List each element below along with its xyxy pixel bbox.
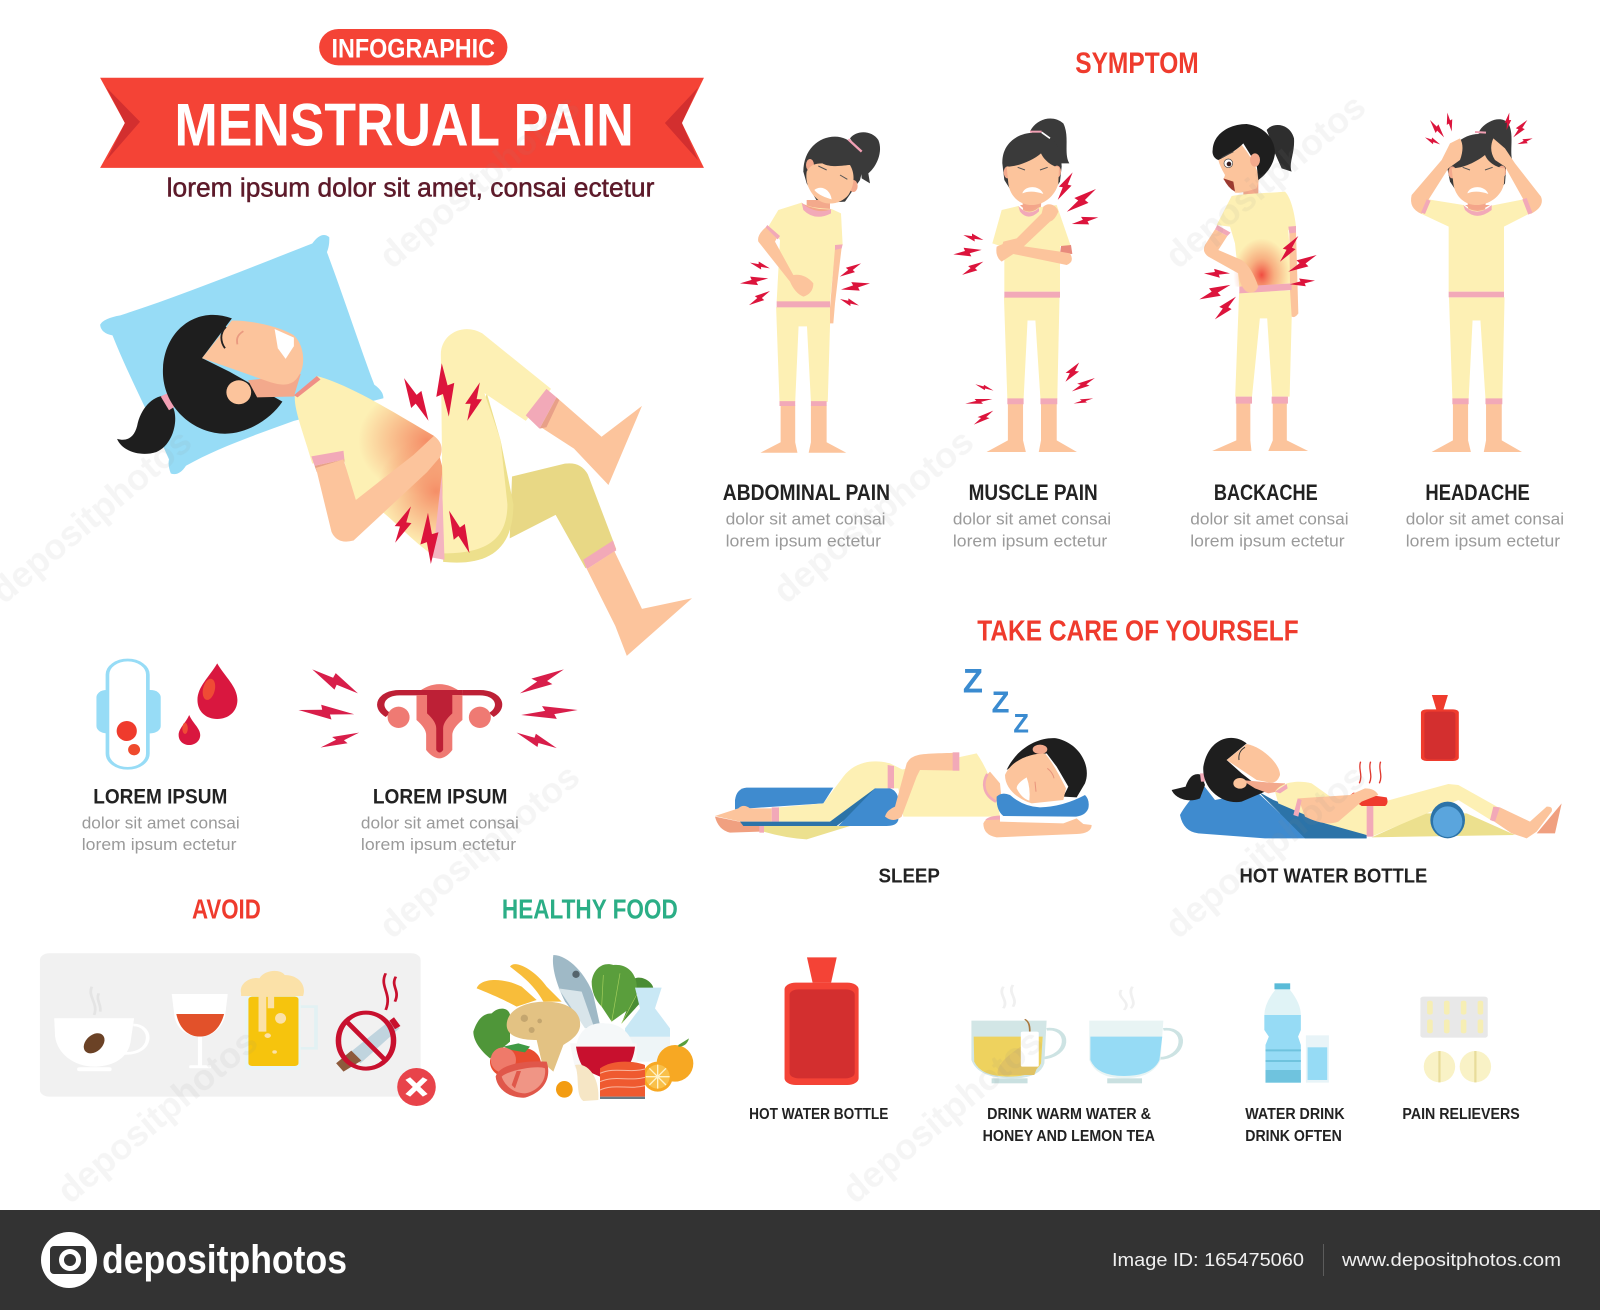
title ribbon — [100, 78, 704, 168]
symptom labels: lorem ipsum ectetur — [953, 532, 1108, 550]
figure: abdominal pain — [758, 132, 880, 453]
icon: wine glass — [172, 994, 228, 1068]
icon: coffee cup — [54, 987, 148, 1071]
heading: healthy food: HEALTHY FOOD — [502, 893, 678, 924]
watermarks: depositphotos — [49, 1020, 265, 1211]
symptom labels: MUSCLE PAIN — [969, 481, 1098, 505]
icon: bolts abdominal — [739, 259, 871, 309]
text: lorem ipsum right: LOREM IPSUM — [373, 785, 507, 808]
icon: pain bolts — [388, 362, 487, 564]
icon: water bottle and glass — [1264, 983, 1329, 1083]
figure: headache — [1411, 119, 1542, 452]
icon: tea cup — [971, 985, 1064, 1083]
icon: no smoking — [336, 973, 400, 1072]
logo text: depositphotos — [102, 1238, 347, 1282]
icon: bolts backache — [1197, 233, 1320, 323]
label: hot water bottle: HOT WATER BOTTLE — [1240, 865, 1427, 888]
panel: symptoms — [723, 47, 1564, 550]
figure: sleeping woman — [715, 738, 1092, 839]
heading: take care of yourself: TAKE CARE OF YOURSELF — [977, 616, 1299, 647]
symptom labels: dolor sit amet consai — [1190, 510, 1349, 528]
symptom labels — [723, 481, 1564, 550]
icon: zzz: Z — [963, 662, 983, 700]
text: lorem ipsum right: dolor sit amet consai — [361, 814, 519, 832]
symptom labels: ABDOMINAL PAIN — [723, 481, 890, 505]
panel: take care — [715, 616, 1562, 888]
icon: sanitary pad — [96, 660, 161, 768]
icon: beer mug — [241, 971, 316, 1070]
icon: zzz — [963, 662, 1029, 738]
icon: hot water bottle — [785, 957, 859, 1085]
badge: infographic: INFOGRAPHIC — [332, 34, 495, 63]
icon: blood drops — [179, 663, 237, 745]
label: water drink: WATER DRINK — [1245, 1106, 1345, 1123]
pillow — [100, 235, 383, 474]
text: lorem ipsum left: lorem ipsum ectetur — [82, 836, 237, 854]
text: lorem ipsum left: dolor sit amet consai — [82, 814, 240, 832]
heading: avoid: AVOID — [192, 893, 261, 924]
icon: uterus — [381, 684, 499, 758]
symptom labels: dolor sit amet consai — [953, 510, 1111, 528]
footer bar — [0, 1210, 1600, 1310]
watermarks: depositphotos — [834, 1020, 1050, 1211]
image id: Image ID: 165475060 — [1112, 1250, 1304, 1270]
label: sleep: SLEEP — [879, 865, 940, 888]
label: drink warm water: HONEY AND LEMON TEA — [983, 1128, 1155, 1145]
heading: symptom: SYMPTOM — [1075, 47, 1199, 80]
figure: muscle pain — [987, 118, 1077, 452]
symptom labels: lorem ipsum ectetur — [726, 532, 881, 550]
panel: avoid box — [40, 953, 421, 1097]
panel: header and main figure — [100, 29, 704, 656]
text: lorem ipsum left: LOREM IPSUM — [93, 785, 227, 808]
label: water drink: DRINK OFTEN — [1245, 1128, 1342, 1145]
icon: bolts muscle — [953, 170, 1100, 427]
symptom labels: lorem ipsum ectetur — [1190, 532, 1345, 550]
watermarks: depositphotos — [1157, 755, 1373, 946]
icon: pain relievers — [1420, 997, 1491, 1082]
watermarks: depositphotos — [371, 85, 587, 276]
icon: bolts headache — [1424, 112, 1534, 147]
panel: left icons, avoid and food — [40, 660, 678, 1106]
figure: woman with hot water bottle — [1172, 738, 1562, 838]
text: lorem ipsum right — [361, 785, 519, 854]
watermarks: depositphotos — [371, 755, 587, 946]
symptom labels: BACKACHE — [1214, 481, 1318, 505]
icon: zzz: Z — [992, 685, 1009, 719]
watermarks — [0, 85, 1373, 1211]
subtitle: lorem ipsum dolor sit amet, consai ectetur — [167, 173, 654, 202]
icon: steam — [1359, 762, 1381, 783]
text: lorem ipsum left — [82, 785, 240, 854]
title ribbon: MENSTRUAL PAIN — [174, 92, 634, 159]
label: drink warm water — [983, 1106, 1155, 1145]
watermarks: depositphotos — [765, 420, 981, 611]
label: hot water bottle: HOT WATER BOTTLE — [749, 1106, 888, 1123]
symptom labels: dolor sit amet consai — [726, 510, 886, 528]
watermarks: depositphotos — [1157, 85, 1373, 276]
panel: remedies — [749, 957, 1520, 1145]
badge: infographic — [319, 29, 507, 65]
icon: cross badge — [397, 1068, 436, 1106]
logo: camera — [41, 1232, 97, 1288]
figure: backache — [1204, 124, 1308, 451]
icon: zzz: Z — [1013, 708, 1029, 738]
label: drink warm water: DRINK WARM WATER & — [987, 1106, 1151, 1123]
woman lying with cramps — [117, 315, 692, 656]
icon: uterus bolts — [297, 664, 579, 753]
text: lorem ipsum right: lorem ipsum ectetur — [361, 836, 516, 854]
website: www.depositphotos.com — [1341, 1250, 1561, 1270]
icon: hot water bottle small — [1421, 695, 1459, 761]
icon: water cup — [1089, 987, 1181, 1083]
label: water drink — [1245, 1106, 1345, 1145]
icon: healthy food pile — [473, 955, 693, 1102]
